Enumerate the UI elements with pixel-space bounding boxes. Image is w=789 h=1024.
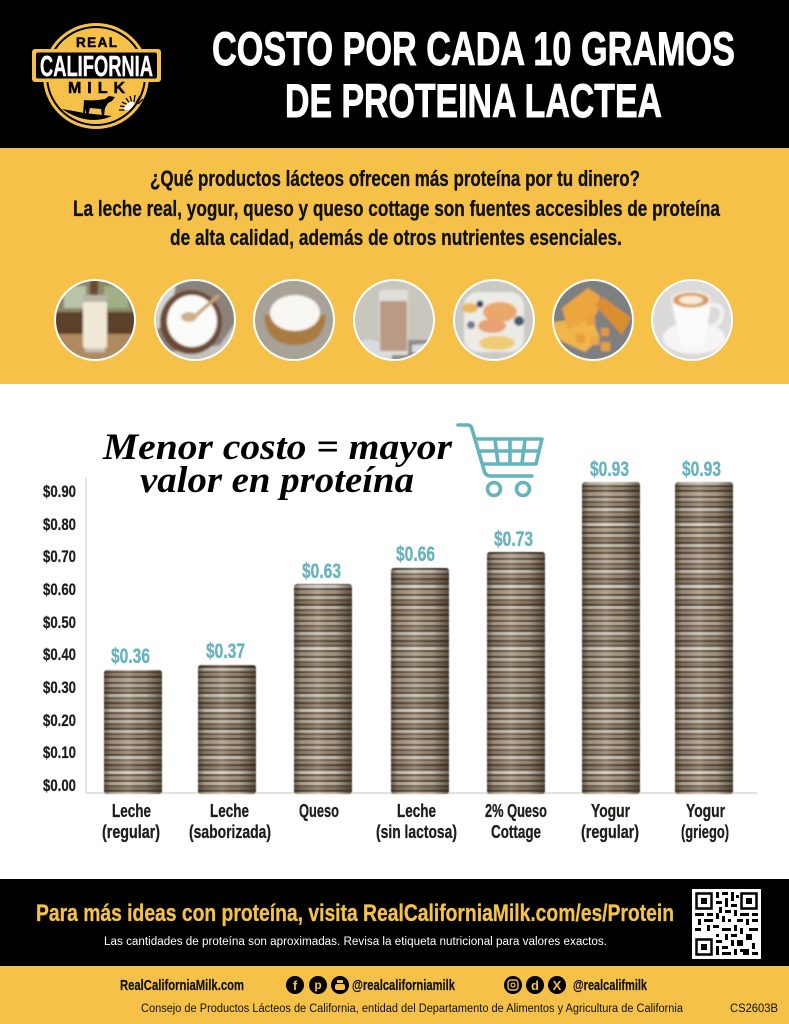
social handle: realcalifmilk: @realcalifmilk [573,977,647,994]
bar: Queso: Queso [299,801,339,821]
social icons: Instagram, TikTok, X: d [531,978,539,993]
title [212,22,735,127]
footer info band [0,966,789,1024]
y axis: $0.30 [43,678,76,697]
chart heading [102,427,453,501]
bar: Leche regular: $0.36 [111,645,150,668]
y axis: $0.40 [43,645,76,664]
bar: Yogur regular: $0.93 [590,458,629,481]
social icons: Facebook, Pinterest, YouTube: f [293,978,298,993]
intro text: ¿Qué productos lácteos ofrecen más proteína por tu dinero? [150,166,640,191]
organisation credit: Consejo de Productos Lácteos de California, entidad del Departamento de Alimentos y Agricultura de California [141,1003,684,1015]
logo: Real California Milk: REAL [76,35,117,50]
bar: Yogur griego: $0.93 [682,458,721,481]
y axis: $0.00 [43,776,76,795]
logo: Real California Milk: CALIFORNIA [40,51,153,83]
chart heading: valor en proteína [140,460,414,501]
photo: chocolate milk [353,279,435,361]
bar: Leche sin lactosa [376,543,457,842]
y axis: $0.90 [43,482,76,501]
bar: Leche regular [102,645,162,842]
photo: yogurt parfait [453,279,535,361]
y axis: $0.10 [43,743,76,762]
bar: Leche sin lactosa: Leche [397,801,436,821]
intro band [0,148,789,384]
y axis: $0.20 [43,711,76,730]
photo: glass of milk [54,279,136,361]
header band [0,0,789,148]
bar: Leche regular: Leche [112,801,151,821]
y axis: $0.60 [43,580,76,599]
logo: Real California Milk: MILK [68,80,125,97]
logo: Real California Milk [32,23,161,129]
bar: Yogur griego: (griego) [681,822,729,842]
social icons: Facebook, Pinterest, YouTube: p [314,978,322,992]
y axis: $0.70 [43,547,76,566]
social icons: Instagram, TikTok, X [504,976,566,994]
bar: Yogur regular: (regular) [581,822,639,842]
bar: Yogur griego: Yogur [686,801,725,821]
bar: Leche saborizada: Leche [210,801,249,821]
bar: Leche saborizada: (saborizada) [189,822,271,842]
bar: 2% Queso Cottage: $0.73 [494,528,533,551]
bar: 2% Queso Cottage: 2% Queso [485,801,547,821]
social icons: Instagram, TikTok, X: X [553,978,562,993]
bar: Leche sin lactosa: (sin lactosa) [376,822,457,842]
bar: Queso: $0.63 [302,560,341,583]
photo: coffee latte [651,279,733,361]
chart heading: Menor costo = mayor [102,427,453,468]
bar: Leche sin lactosa: $0.66 [396,543,435,566]
bar: 2% Queso Cottage [485,528,547,842]
photo: cheddar cheese [552,279,634,361]
disclaimer: Las cantidades de proteína son aproximadas. Revisa la etiqueta nutricional para valores exactos. [104,936,607,948]
QR code [692,889,761,959]
photo: cottage cheese bowl [253,279,335,361]
website: RealCaliforniaMilk.com [120,977,244,994]
social icons: Facebook, Pinterest, YouTube [286,976,349,994]
intro text: de alta calidad, además de otros nutrientes esenciales. [170,225,622,250]
bar: Queso [294,560,352,821]
y axis: $0.50 [43,613,76,632]
bar: Leche saborizada [189,640,271,842]
bar: Yogur griego [675,458,733,842]
social handle: realcaliforniamilk: @realcaliforniamilk [352,977,455,994]
document code: CS2603B [730,1003,778,1015]
bar: 2% Queso Cottage: Cottage [491,822,541,842]
y axis [43,478,757,795]
bar: Yogur regular [581,458,640,842]
y axis: $0.80 [43,515,76,534]
bar: Leche saborizada: $0.37 [206,640,245,663]
icon: shopping cart [458,425,542,496]
bar: Leche regular: (regular) [102,822,160,842]
photo: yogurt bowl [154,279,236,361]
bar: Yogur regular: Yogur [591,801,630,821]
intro text [73,166,721,250]
footer call to action band [0,879,789,966]
